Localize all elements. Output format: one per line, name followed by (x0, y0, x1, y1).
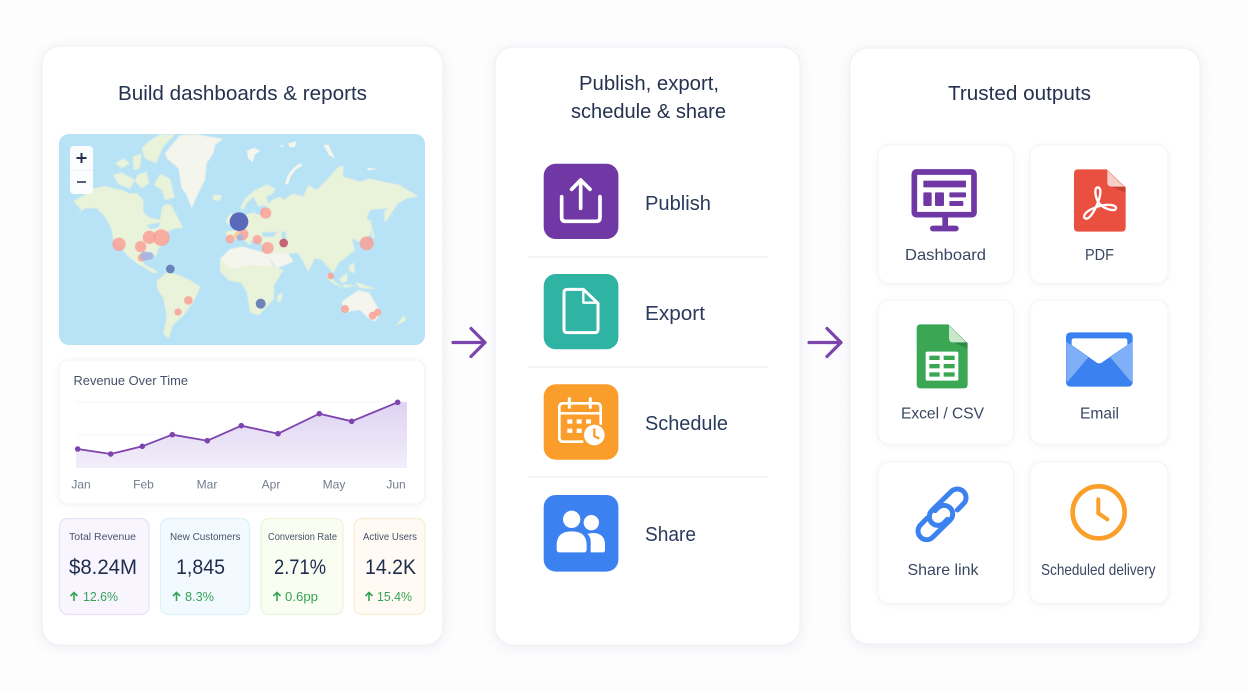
KPI: total revenue: Total Revenue (69, 531, 136, 543)
month axis labels (71, 478, 406, 492)
month axis labels: Jan (71, 478, 91, 492)
KPI: new customers: 8.3% (185, 589, 214, 604)
KPI: new customers: New Customers (170, 531, 240, 543)
heading: trusted outputs: Trusted outputs (948, 83, 1091, 105)
map bubbles (112, 207, 381, 320)
KPI: active users: Active Users (363, 531, 417, 543)
map arctic islands (247, 141, 398, 222)
KPI: new customers (160, 518, 250, 614)
row: share (544, 495, 696, 572)
card: pdf (1030, 145, 1168, 283)
KPI: total revenue: 12.6% (83, 589, 118, 604)
KPI: active users (354, 518, 425, 614)
KPI: active users: 14.2K (365, 556, 416, 579)
area under line (76, 402, 407, 468)
card: dashboard (878, 145, 1013, 283)
chart card: revenue over time (59, 360, 424, 504)
row: schedule (544, 384, 728, 460)
row: publish: Publish (645, 193, 711, 215)
revenue line (75, 400, 401, 457)
card: scheduled delivery: Scheduled delivery (1041, 562, 1156, 579)
card: pdf: PDF (1085, 247, 1114, 264)
row: publish (544, 164, 711, 239)
row: export (544, 274, 705, 349)
card: dashboard: Dashboard (905, 247, 986, 264)
month axis labels: Feb (133, 478, 154, 492)
heading: publish (571, 73, 726, 123)
world map (59, 134, 425, 345)
card: share link: Share link (908, 562, 979, 579)
row: export: Export (645, 303, 705, 325)
row: share: Share (645, 524, 696, 546)
KPI: conversion rate: 2.71% (274, 556, 326, 579)
card: excel csv (878, 300, 1013, 444)
month axis labels: Apr (262, 478, 280, 492)
KPI: new customers: 1,845 (176, 556, 225, 579)
chart title: Revenue Over Time (74, 373, 188, 388)
heading: publish: Publish, export, (579, 73, 719, 95)
KPI: conversion rate: 0.6pp (285, 589, 318, 604)
card: email: Email (1080, 406, 1119, 422)
heading: build dashboards: Build dashboards & reports (118, 83, 367, 105)
month axis labels: May (323, 478, 345, 492)
KPI: total revenue (60, 518, 149, 614)
card: scheduled delivery (1030, 462, 1168, 604)
card: excel csv: Excel / CSV (901, 406, 984, 422)
KPI: total revenue: $8.24M (69, 556, 137, 579)
map zoom control (70, 146, 93, 194)
month axis labels: Mar (197, 478, 217, 492)
map land: continents (73, 134, 418, 339)
panel: publish, export, schedule and share (495, 47, 800, 645)
KPI: conversion rate (261, 518, 343, 614)
arrow: publish to outputs (809, 328, 841, 356)
card: share link (878, 462, 1013, 604)
KPI: active users: 15.4% (377, 589, 412, 604)
month axis labels: Jun (386, 478, 406, 492)
panel: trusted outputs (850, 48, 1200, 644)
KPI: conversion rate: Conversion Rate (268, 531, 337, 543)
panel: build dashboards and reports (42, 46, 443, 645)
card: email (1030, 300, 1168, 444)
heading: publish: schedule & share (571, 101, 726, 123)
row: schedule: Schedule (645, 413, 728, 435)
arrow: build to publish (453, 328, 485, 356)
